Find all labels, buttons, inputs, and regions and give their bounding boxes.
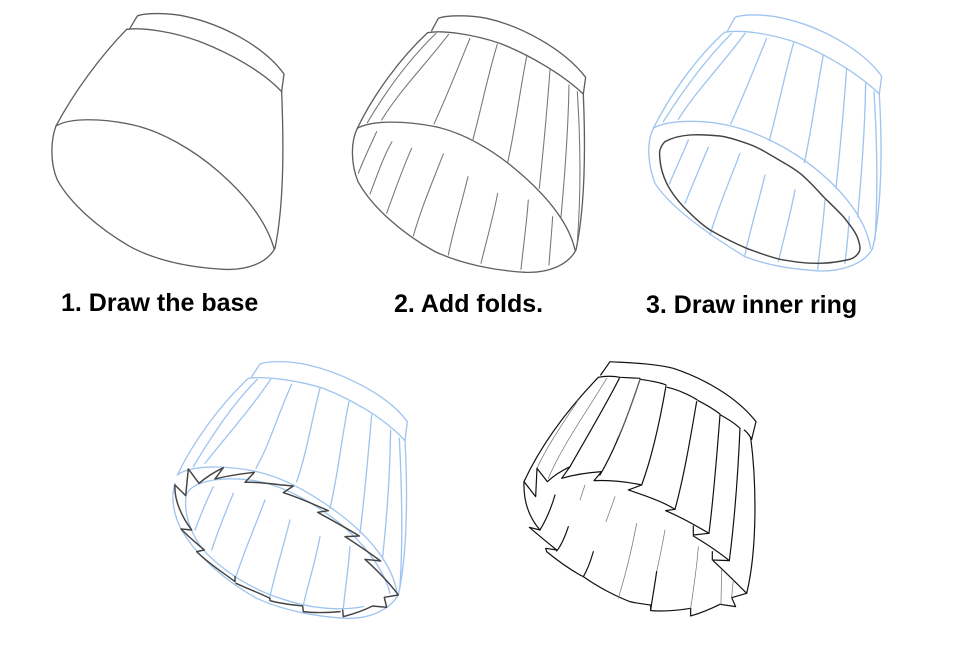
sketch 2: base with folds	[352, 16, 586, 272]
heading: step 1: 1. Draw the base	[61, 289, 258, 317]
inner ring	[660, 135, 860, 263]
zigzag folds	[175, 468, 398, 617]
sketch 1: skirt base	[52, 14, 284, 269]
heading: step 3: 3. Draw inner ring	[646, 291, 857, 319]
sketch 3: blue base with inner ring	[649, 15, 882, 271]
sketch 5: final inked pleated skirt	[524, 362, 756, 616]
sketch 4: blue base with zigzag ring	[173, 362, 407, 618]
heading: step 2: 2. Add folds.	[394, 290, 543, 318]
